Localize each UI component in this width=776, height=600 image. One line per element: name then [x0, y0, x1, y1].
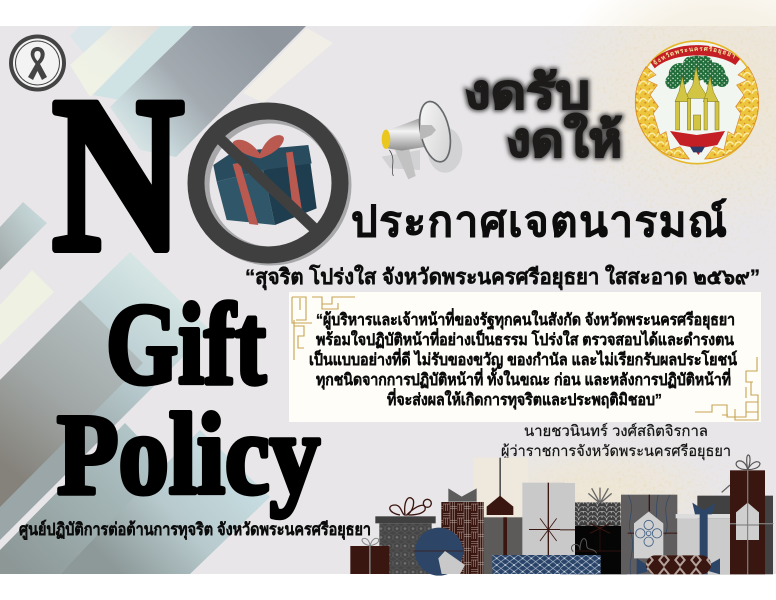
prohibition ring shadow	[200, 114, 342, 256]
megaphone horn	[387, 118, 427, 151]
icon: black mourning ribbon badge	[9, 34, 66, 92]
title word: Policy: Policy	[57, 391, 320, 519]
corner ornament: bottom-right	[695, 357, 758, 420]
heading: abstain from receiving: งดรับ	[464, 65, 590, 118]
emblem gold border left	[635, 67, 689, 159]
heading: declaration of intent: ประกาศเจตนารมณ์	[351, 198, 727, 245]
emblem green tree	[665, 56, 729, 89]
heading: abstain from giving: งดให้	[506, 112, 622, 166]
gifts left group	[350, 458, 565, 576]
emblem banner text: จังหวัดพระนครศรีอยุธยา	[653, 46, 735, 64]
icon: megaphone	[382, 99, 462, 179]
emblem gold border right	[705, 67, 759, 159]
emblem golden pavilion	[675, 67, 719, 130]
pledge panel background	[289, 292, 761, 422]
megaphone yellow cap	[382, 130, 390, 149]
pledge line 4: ทุกชนิดจากการปฏิบัติหน้าที่ ทั้งในขณะ ก่อน และหลังการปฏิบัติหน้าที่	[316, 367, 731, 390]
signatory name: นายชวนินทร์ วงศ์สถิตจิรกาล	[524, 423, 708, 440]
icon: Phra Nakhon Si Ayutthaya provincial emblem	[634, 40, 760, 164]
gift box	[213, 135, 317, 225]
title word: Gift: Gift	[106, 281, 266, 409]
emblem red garuda	[670, 131, 725, 155]
background: geometric diagonal bands, left side	[0, 26, 333, 574]
gifts right group	[560, 455, 773, 574]
signatory title: ผู้ว่าราชการจังหวัดพระนครศรีอยุธยา	[501, 443, 731, 461]
megaphone handle	[395, 146, 416, 179]
heading: abstain from receiving: งดรับ	[464, 65, 590, 118]
emblem garuda base	[690, 147, 705, 152]
footer organisation name: ศูนย์ปฏิบัติการต่อต้านการทุจริต จังหวัดพระนครศรีอยุธยา	[19, 519, 371, 541]
prohibition slash	[216, 135, 318, 232]
panel: pledge statement	[289, 292, 761, 422]
megaphone driver	[420, 125, 436, 140]
megaphone bell	[415, 99, 455, 165]
pledge line 3: เป็นแบบอย่างที่ดี ไม่รับของขวัญ ของกำนัล และไม่เรียกรับผลประโยชน์	[309, 348, 737, 370]
background: gold speckle haze	[528, 0, 776, 525]
emblem red banner	[651, 45, 740, 68]
prohibition ring	[196, 111, 340, 255]
illustration: pile of wrapped gifts	[350, 455, 773, 576]
slogan: “สุจริต โปร่งใส จังหวัดพระนครศรีอยุธยา ใสสะอาด ๒๕๖๙”	[245, 264, 760, 291]
pledge line 5: ที่จะส่งผลให้เกิดการทุจริตและประพฤติมิชอบ”	[387, 388, 662, 410]
pledge line 2: พร้อมใจปฏิบัติหน้าที่อย่างเป็นธรรม โปร่งใส ตรวจสอบได้และดำรงตน	[316, 328, 734, 349]
icon: crossed-out gift box (no gifts)	[196, 111, 342, 256]
emblem disc	[636, 41, 758, 164]
corner ornament: top-left	[292, 297, 355, 360]
megaphone cord	[389, 150, 393, 176]
title letter: N: N	[52, 52, 184, 298]
megaphone shadow	[428, 127, 462, 173]
heading: abstain from giving: งดให้	[506, 112, 622, 166]
